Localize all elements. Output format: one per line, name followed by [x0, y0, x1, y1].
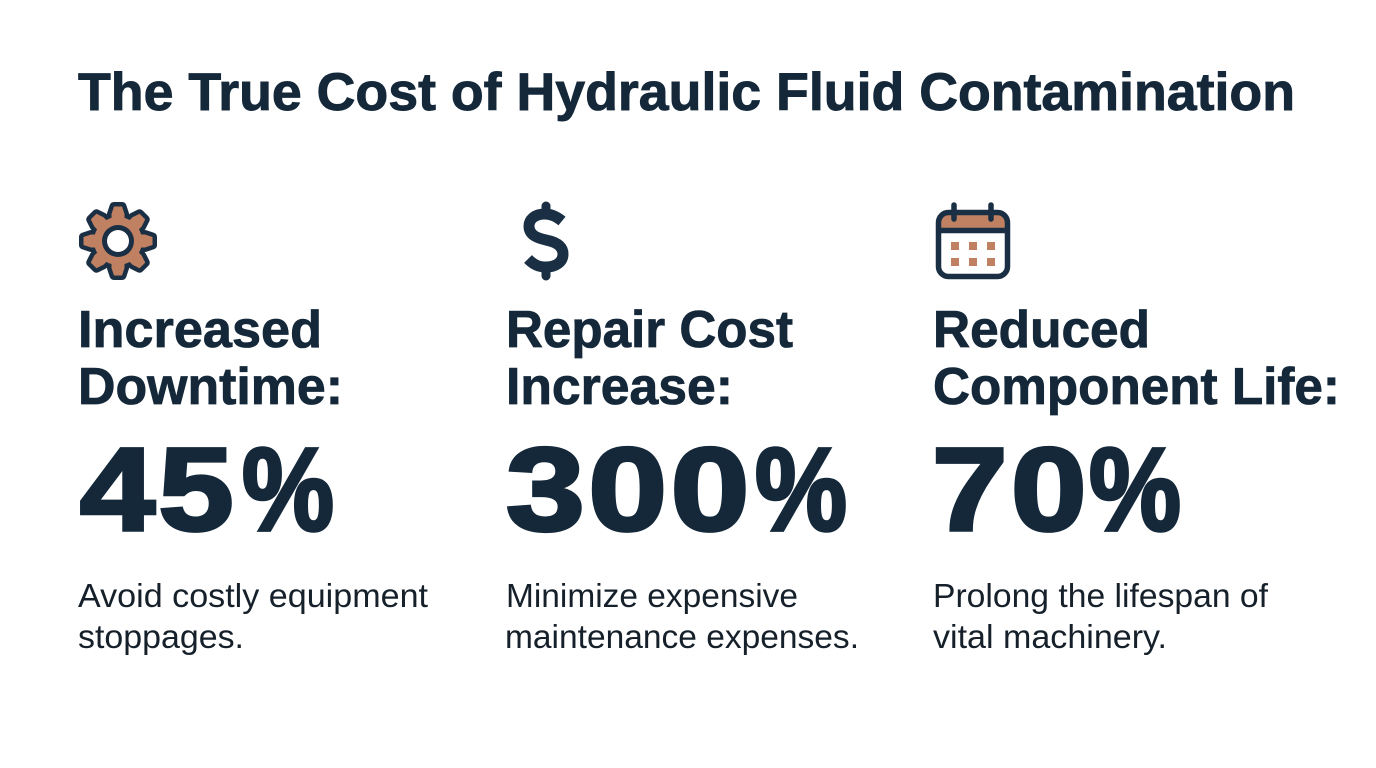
heading: reduced component life: Reduced — [933, 301, 1150, 359]
icon: dollar sign — [528, 206, 563, 276]
panel: reduced component life — [932, 205, 1340, 655]
heading: increased downtime: Increased — [78, 301, 322, 359]
heading: increased downtime — [78, 301, 343, 416]
icon: gear — [84, 206, 152, 276]
description: repair cost — [505, 577, 859, 655]
statistic: 300%: 300 — [506, 424, 753, 556]
description: component life — [933, 577, 1269, 655]
panel: repair cost increase — [505, 206, 859, 655]
icon: calendar — [938, 205, 1008, 276]
title: The True Cost of Hydraulic Fluid Contamination — [78, 63, 1295, 122]
statistic: 300%: % — [755, 424, 847, 556]
description: downtime: stoppages. — [78, 618, 244, 655]
description: downtime — [78, 577, 428, 655]
heading: repair cost increase — [506, 301, 793, 416]
panel: increased downtime — [78, 206, 428, 655]
statistic: 70%: 70 — [932, 424, 1090, 556]
description: component life: vital machinery. — [933, 618, 1167, 655]
heading: repair cost increase: Repair Cost — [506, 301, 793, 359]
statistic: 70%: % — [1089, 424, 1181, 556]
statistic: 45%: % — [242, 424, 334, 556]
statistic: 45%: 45 — [80, 424, 237, 556]
heading: repair cost increase: Increase: — [506, 358, 733, 416]
description: component life: Prolong the lifespan of — [933, 577, 1269, 614]
heading: reduced component life — [933, 301, 1340, 416]
heading: increased downtime: Downtime: — [78, 358, 343, 416]
description: repair cost: maintenance expenses. — [505, 618, 859, 655]
heading: reduced component life: Component Life: — [933, 358, 1340, 416]
description: repair cost: Minimize expensive — [506, 577, 798, 614]
description: downtime: Avoid costly equipment — [78, 577, 428, 614]
